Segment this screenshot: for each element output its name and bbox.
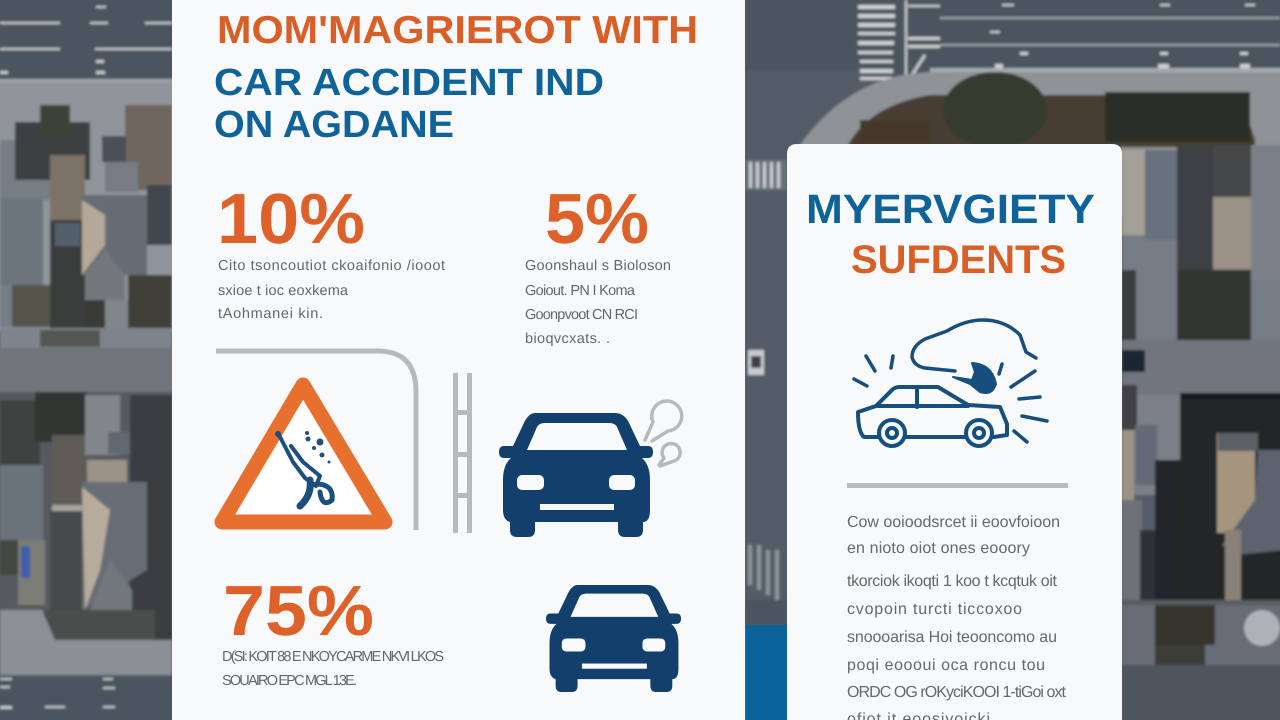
text block: side description [847, 514, 1067, 720]
stat: 5 percent: 5% [545, 180, 649, 259]
icon: warning triangle [222, 385, 385, 522]
text block: 75 percent description [222, 649, 444, 689]
left strip: middle road [0, 348, 175, 393]
icon: falling debris figure [276, 431, 332, 506]
heading: orange side title: SUFDENTS [851, 238, 1066, 282]
text block: side description: en nioto oiot ones eooory [847, 540, 1030, 557]
text block: 5 percent description: Goonpvoot CN RCI [525, 307, 638, 323]
icon: crashed car with smoke [854, 320, 1047, 446]
left strip: upper houses [0, 82, 175, 348]
text block: side description: ORDC OG rOKyciKOOI 1-tiGoi oxt [847, 684, 1067, 701]
text block: side description: cvopoin turcti ticcoxoo [847, 601, 1022, 618]
icon: road ladder marking [453, 373, 472, 533]
text block: 75 percent description: D(SI: KOIT 88 E NKOYCARME NKVI LKOS [222, 649, 444, 665]
text block: 5 percent description: Goonshaul s Bioloson [525, 258, 671, 274]
icon: smoke puffs [645, 401, 682, 466]
text block: side description: snoooarisa Hoi teooncomo au [847, 629, 1057, 646]
left strip: lower houses [0, 392, 175, 675]
text block: 10 percent description: Cito tsoncoutiot ckoaifonio /iooot [218, 258, 445, 274]
right side: left gap details [745, 160, 787, 626]
panel: main statistics [172, 0, 745, 720]
stat: 75 percent: 75% [223, 572, 374, 651]
stat: 10 percent: 10% [217, 180, 365, 259]
icon: front view car with smoke [499, 401, 682, 537]
left strip: top road [0, 0, 175, 82]
panel: side summary [787, 144, 1122, 720]
road curve line [216, 351, 416, 530]
left strip: bottom road [0, 675, 175, 720]
icon: small front view car [546, 585, 681, 692]
text block: side description: tkorciok ikoqti 1 koo t kcqtuk oit [847, 573, 1058, 590]
text block: 5 percent description [525, 258, 671, 347]
blue accent strip [746, 625, 787, 720]
text block: side description: poqi eoooui oca roncu tou [847, 657, 1045, 674]
right strip: houses [1122, 145, 1280, 720]
text block: 75 percent description: SOUAIRO EPC MGL 13E. [222, 673, 357, 689]
heading: blue title line two: ON AGDANE [214, 104, 454, 146]
heading: blue side title: MYERVGIETY [806, 186, 1095, 232]
right side: corner sidewalk and trees [800, 68, 1280, 217]
text block: 10 percent description [218, 258, 445, 322]
right side: road and crosswalk [745, 0, 1280, 630]
text block: 10 percent description: sxioe t ioc eoxkema [218, 283, 349, 299]
text block: 10 percent description: tAohmanei kin. [218, 306, 323, 322]
divider line [847, 483, 1068, 488]
text block: 5 percent description: Goiout. PN I Koma [525, 283, 636, 299]
heading: blue title line one: CAR ACCIDENT IND [214, 62, 604, 104]
heading: orange title line: MOM'MAGRIEROT WITH [217, 9, 698, 52]
text block: 5 percent description: bioqvcxats. . [525, 331, 610, 347]
text block: side description: Cow ooioodsrcet ii eoovfoioon [847, 514, 1060, 531]
